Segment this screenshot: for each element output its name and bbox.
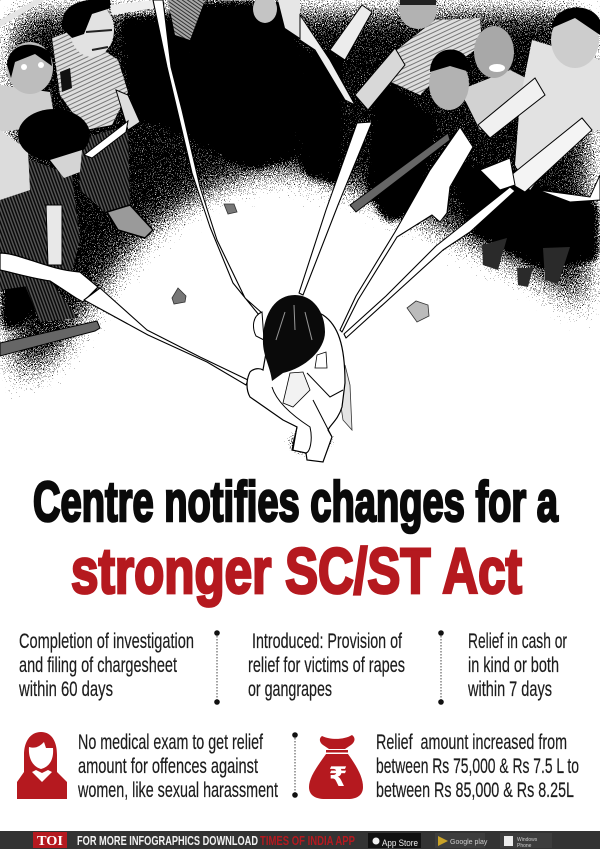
badge: Google play xyxy=(435,833,488,848)
footer bar xyxy=(0,831,600,849)
item: provision of relief: or gangrapes xyxy=(248,678,332,701)
man with phone: arm xyxy=(116,90,140,130)
stones xyxy=(172,204,429,322)
item: no medical exam: amount for offences against xyxy=(78,755,258,778)
ear and arm loop xyxy=(254,312,264,340)
item: provision of relief: Introduced: Provision of xyxy=(252,630,402,653)
shoes right xyxy=(482,238,570,287)
second man: head xyxy=(7,42,53,94)
hand over head xyxy=(315,352,327,368)
item: investigation within 60 days: Completion of investigation xyxy=(19,630,194,653)
strip torn cloth xyxy=(340,127,473,332)
divider 2 xyxy=(438,630,444,705)
item: relief amount increased xyxy=(376,731,579,802)
right group of men xyxy=(300,0,600,287)
body xyxy=(247,300,345,462)
side cloth xyxy=(340,365,352,430)
item: no medical exam: No medical exam to get relief xyxy=(78,731,263,754)
item: relief within 7 days: within 7 days xyxy=(467,678,552,701)
badge: App Store: App Store xyxy=(382,838,418,848)
badge: Windows Phone xyxy=(500,833,552,849)
man right: head xyxy=(551,8,600,68)
badge: Windows Phone: Phone xyxy=(517,843,532,849)
divider 3 xyxy=(292,732,298,798)
man right: shirt xyxy=(515,40,600,190)
third man: face xyxy=(50,150,82,178)
man top centre: head xyxy=(399,0,437,29)
icon: woman xyxy=(17,732,67,799)
stipple beneath feet xyxy=(286,427,334,457)
cloth strips pulled from the girl xyxy=(84,0,515,385)
man with phone: head xyxy=(62,0,114,57)
stick xyxy=(0,321,100,356)
strip upper centre xyxy=(299,122,372,295)
item: relief within 7 days: in kind or both xyxy=(468,654,559,677)
arm gripping cloth xyxy=(0,253,98,302)
stone top xyxy=(224,204,237,214)
box stone right xyxy=(407,301,429,322)
badge: Google play: Google play xyxy=(450,839,488,846)
stone left xyxy=(172,288,186,304)
man dark hair: head xyxy=(429,50,470,110)
centre man face xyxy=(253,0,277,23)
phone xyxy=(60,68,72,92)
top left arm xyxy=(0,0,45,27)
stippled ground and crowd shadow xyxy=(0,0,600,400)
item: no medical exam xyxy=(77,731,278,802)
illustration: mob pulling at the girl's clothes xyxy=(0,0,600,462)
item: investigation within 60 days: within 60 days xyxy=(18,678,113,701)
man with phone: shirt xyxy=(52,30,128,130)
third man: hair xyxy=(18,109,90,161)
second man: shirt xyxy=(0,85,55,132)
legs and arm outlines xyxy=(272,373,343,453)
item: investigation within 60 days xyxy=(18,630,194,701)
cloth at right edge xyxy=(538,175,600,202)
badge: App Store xyxy=(368,833,421,848)
foreground dark knee xyxy=(25,283,78,322)
footer call to action: FOR MORE INFOGRAPHICS DOWNLOAD xyxy=(77,833,258,848)
arm right 2 xyxy=(505,118,592,192)
hair xyxy=(263,295,325,381)
sandal xyxy=(107,205,153,238)
raised arm left xyxy=(330,5,372,60)
torn cloth on chest xyxy=(283,372,310,407)
item: provision of relief: relief for victims of rapes xyxy=(248,654,405,677)
item: investigation within 60 days: and filing of chargesheet xyxy=(19,654,177,677)
strip right xyxy=(344,187,515,338)
man bald: head xyxy=(474,26,514,78)
hatching shirt xyxy=(168,0,205,40)
centre top figures xyxy=(168,0,300,40)
stick right xyxy=(350,133,450,212)
man bald: shirt xyxy=(460,70,530,130)
girl curled up xyxy=(247,295,352,462)
divider 1 xyxy=(214,630,220,705)
item: no medical exam: women, like sexual harassment xyxy=(77,779,278,802)
icon: money bag with rupee: ₹ xyxy=(329,762,347,793)
hair parting xyxy=(276,305,312,340)
icon: money bag with rupee xyxy=(309,735,363,799)
arm right 1 xyxy=(478,78,545,138)
badge: Windows Phone: Windows xyxy=(517,837,538,843)
hand xyxy=(480,158,515,190)
strip bottom left xyxy=(84,288,248,385)
strip top left xyxy=(153,0,262,315)
left group of men xyxy=(0,0,155,356)
footer app name: TIMES OF INDIA APP xyxy=(260,833,355,848)
cloth left xyxy=(300,15,355,105)
trousers of left man xyxy=(78,125,130,212)
white fabric held by man xyxy=(84,121,128,158)
dark trousers behind the crowd xyxy=(0,0,600,335)
raised arm centre xyxy=(355,48,405,110)
item: provision of relief xyxy=(248,630,405,701)
third man: lower hand and cloth xyxy=(46,205,62,265)
TOI logo: TOI xyxy=(37,834,63,849)
item: relief within 7 days xyxy=(467,630,567,701)
title xyxy=(33,470,559,607)
man top centre: shirt xyxy=(375,18,482,95)
third man: shirt and trousers xyxy=(0,160,80,290)
TOI logo xyxy=(33,832,67,849)
